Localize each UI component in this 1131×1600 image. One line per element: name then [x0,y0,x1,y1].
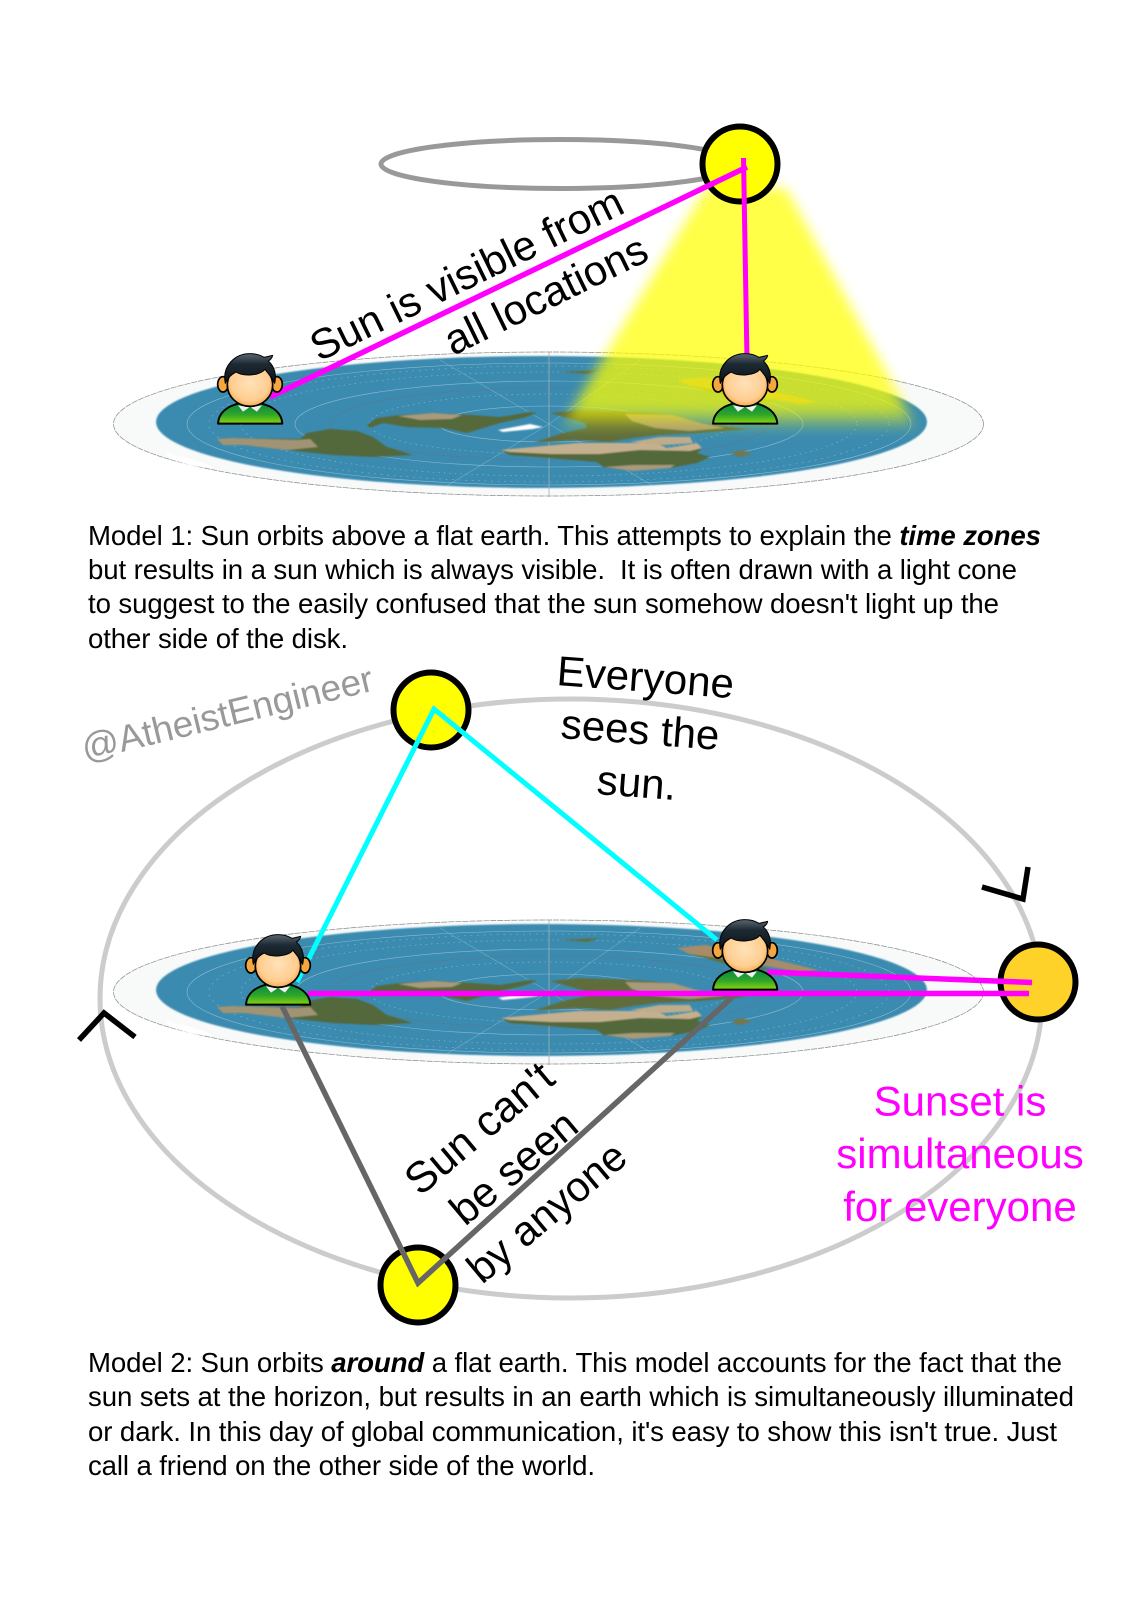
label: all locations: all locations [436,225,655,364]
label: sunset is simultaneous: simultaneous [836,1130,1084,1177]
label: sun can't be seen: be seen [441,1101,587,1235]
text block: model 2 description [88,1347,1074,1481]
watermark: @AtheistEngineer [77,658,377,769]
sun [702,126,778,202]
label: sun can't be seen: Sun can't [396,1053,564,1205]
label: sun can't be seen [396,1053,636,1292]
cyan sight lines [297,709,717,982]
text block: model 1 description: but results in a sun which is always visible. It is often drawn with a light cone [88,554,1017,585]
text block: model 1 description [88,520,1041,654]
text block: model 1 description: to suggest to the easily confused that the sun somehow doesn't light up the [88,588,999,619]
label: sunset is simultaneous: for everyone [843,1183,1077,1230]
label: everyone sees the sun: sun. [595,756,678,809]
observer left [218,354,282,424]
label: sunset is simultaneous: Sunset is [874,1078,1046,1124]
text block: model 1 description: Model 1: Sun orbits above a flat earth. This attempts to explain the time zones [88,520,1041,551]
flat earth disk [114,920,984,1065]
panel: model 1 diagram [114,126,984,497]
observer left [246,935,310,1005]
text block: model 2 description: sun sets at the horizon, but results in an earth which is simultaneously illuminated [88,1381,1074,1412]
text block: model 2 description: call a friend on the other side of the world. [88,1450,595,1481]
label: sun can't be seen: by anyone [458,1132,636,1292]
text block: model 2 description: Model 2: Sun orbits around a flat earth. This model accounts for the fact that the [88,1347,1062,1378]
sight line to far observer [270,167,747,397]
label: everyone sees the sun [555,647,736,809]
sight line to near observer [744,158,747,360]
light cone [560,188,918,430]
label: everyone sees the sun: sees the [559,700,721,759]
text block: model 2 description: or dark. In this day of global communication, it's easy to show this isn't true. Just [88,1416,1057,1447]
label: everyone sees the sun: Everyone [555,647,736,707]
sun orbit ring [100,699,1042,1298]
text block: model 1 description: other side of the disk. [88,623,348,654]
sun: top position [394,672,468,748]
direction arrow left [79,1013,135,1040]
grey blocked sight lines [282,992,738,1283]
label: sunset is simultaneous [836,1078,1084,1230]
observer right [713,354,777,424]
sun orbit ring [381,140,739,188]
magenta sunset lines [308,972,1032,994]
sun: bottom position [380,1248,456,1322]
label: sun visible: Sun is visible from [302,178,631,370]
sun: setting position [1000,944,1076,1020]
panel: model 2 diagram [77,647,1084,1322]
direction arrow right [982,867,1028,899]
flat earth disk [114,352,984,497]
observer right [713,920,777,990]
